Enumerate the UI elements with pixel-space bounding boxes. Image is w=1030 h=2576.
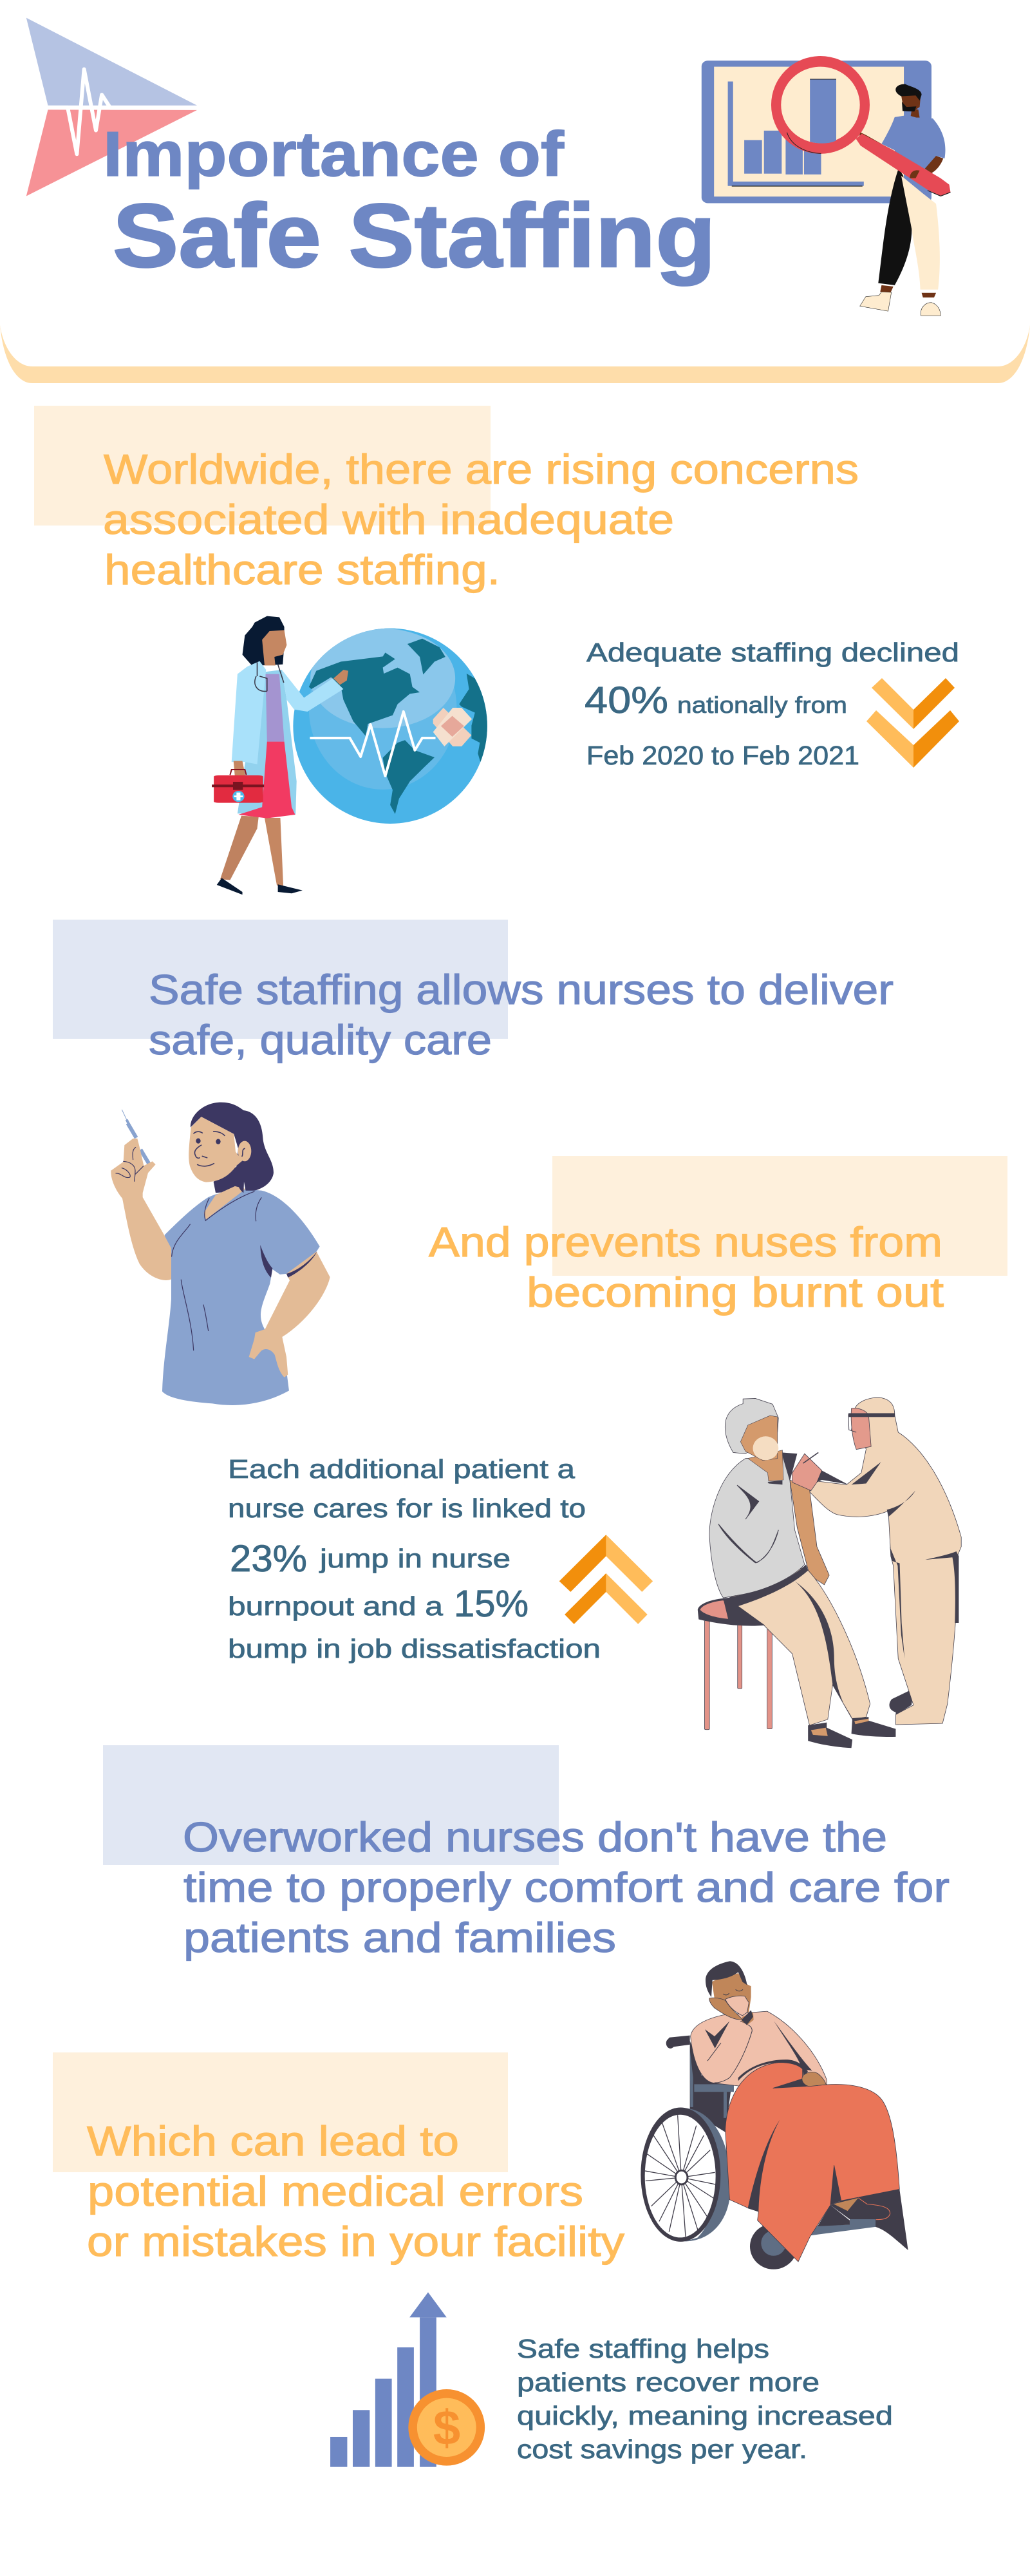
chair frame bbox=[666, 2036, 734, 2132]
highlight box bbox=[34, 406, 491, 526]
title line 1: Importance of bbox=[103, 118, 564, 189]
heading text bbox=[103, 446, 859, 593]
heading text bbox=[149, 966, 894, 1063]
icon: rising bars with coin bbox=[330, 2292, 485, 2467]
icon: down chevrons bbox=[866, 678, 959, 768]
text: cost savings: quickly, meaning increased bbox=[517, 2401, 893, 2430]
highlight box bbox=[103, 1745, 559, 1865]
stat line 2: nationally from bbox=[677, 692, 847, 718]
scrubs bbox=[162, 1188, 320, 1405]
heading text: time to properly comfort and care for bbox=[183, 1864, 950, 1911]
hair bbox=[191, 1103, 274, 1193]
icon: bandage bbox=[433, 708, 472, 746]
heading text: Safe staffing allows nurses to deliver bbox=[149, 966, 894, 1013]
text: cost savings bbox=[517, 2334, 893, 2464]
heading text bbox=[183, 1814, 950, 1961]
number 15%: 15% bbox=[454, 1583, 529, 1625]
stat: adequate staffing declined bbox=[585, 638, 959, 770]
text: cost savings: Safe staffing helps bbox=[517, 2334, 769, 2363]
hip arm bbox=[249, 1251, 330, 1378]
heading text bbox=[87, 2117, 625, 2265]
header white card bbox=[0, 0, 1030, 366]
torso and arm bbox=[691, 2011, 827, 2088]
stat line 3: Feb 2020 to Feb 2021 bbox=[586, 741, 859, 770]
heading text: Worldwide, there are rising concerns bbox=[104, 446, 859, 493]
heading text bbox=[429, 1218, 944, 1316]
hand on lap bbox=[802, 2072, 826, 2087]
face bbox=[189, 1117, 243, 1182]
footrest and legs bbox=[810, 2189, 908, 2250]
stat line 1: Adequate staffing declined bbox=[586, 638, 959, 667]
heading text: patients and families bbox=[183, 1914, 616, 1961]
section: medical errors bbox=[53, 2052, 625, 2265]
doctor figure bbox=[212, 616, 348, 895]
illustration: analyst with chart and magnifier bbox=[702, 56, 951, 316]
number 23%: 23% bbox=[230, 1538, 307, 1580]
highlight box bbox=[53, 2052, 508, 2172]
patient bbox=[709, 1398, 870, 1725]
heading text: healthcare staffing. bbox=[104, 546, 500, 593]
section: safe staffing allows bbox=[53, 920, 894, 1063]
stat text line 2: nurse cares for is linked to bbox=[228, 1493, 586, 1523]
heading text: associated with inadequate bbox=[103, 496, 674, 543]
shoes bbox=[808, 1717, 895, 1748]
icon: heartbeat triangle logo bbox=[26, 18, 197, 196]
heading text: Which can lead to bbox=[87, 2117, 459, 2164]
stat text line 1: Each additional patient a bbox=[228, 1454, 575, 1484]
globe bbox=[292, 627, 491, 824]
dollar sign: $ bbox=[433, 2401, 460, 2456]
icon: up chevrons bbox=[559, 1535, 653, 1624]
nurse in protective suit bbox=[809, 1397, 961, 1725]
header panel bbox=[0, 0, 1030, 383]
section: overworked nurses bbox=[103, 1745, 950, 1961]
section: worldwide concerns bbox=[34, 406, 859, 593]
stool bbox=[698, 1598, 772, 1730]
highlight box bbox=[53, 920, 508, 1039]
bars and arrow bbox=[330, 2292, 485, 2467]
gloved hand with syringe bbox=[792, 1452, 822, 1491]
illustration: patient receiving vaccination bbox=[698, 1397, 961, 1748]
syringe bbox=[122, 1110, 149, 1164]
stat: nurse burnout bbox=[228, 1454, 653, 1663]
heading text: And prevents nuses from bbox=[429, 1218, 942, 1265]
text: cost savings: cost savings per year. bbox=[517, 2434, 807, 2464]
heading text: safe, quality care bbox=[149, 1016, 492, 1063]
stat text line 4: burnpout and a bbox=[228, 1591, 443, 1621]
stat text line 3: jump in nurse bbox=[319, 1544, 510, 1573]
neck bbox=[214, 1166, 243, 1193]
illustration: doctor with globe bbox=[212, 616, 491, 895]
illustration: nurse with syringe bbox=[111, 1103, 330, 1405]
section: prevents burnout bbox=[429, 1156, 1007, 1316]
clothing and hand lines bbox=[116, 1148, 261, 1350]
number 40%: 40% bbox=[585, 679, 668, 721]
heading text: becoming burnt out bbox=[527, 1269, 944, 1316]
big wheel bbox=[641, 2108, 731, 2242]
heading text: or mistakes in your facility bbox=[87, 2218, 625, 2265]
blanket bbox=[726, 2063, 899, 2262]
text: cost savings: patients recover more bbox=[517, 2367, 819, 2397]
title line 2: Safe Staffing bbox=[113, 185, 716, 286]
highlight box bbox=[552, 1156, 1007, 1276]
stat text line 5: bump in job dissatisfaction bbox=[228, 1634, 601, 1663]
head with mask bbox=[706, 1961, 754, 2025]
heading text: Overworked nurses don't have the bbox=[183, 1814, 887, 1861]
raised arm bbox=[111, 1139, 171, 1280]
front wheel bbox=[750, 2224, 797, 2269]
illustration: patient in wheelchair bbox=[641, 1961, 908, 2269]
heading text: potential medical errors bbox=[88, 2168, 583, 2215]
header orange band bbox=[0, 325, 1030, 383]
